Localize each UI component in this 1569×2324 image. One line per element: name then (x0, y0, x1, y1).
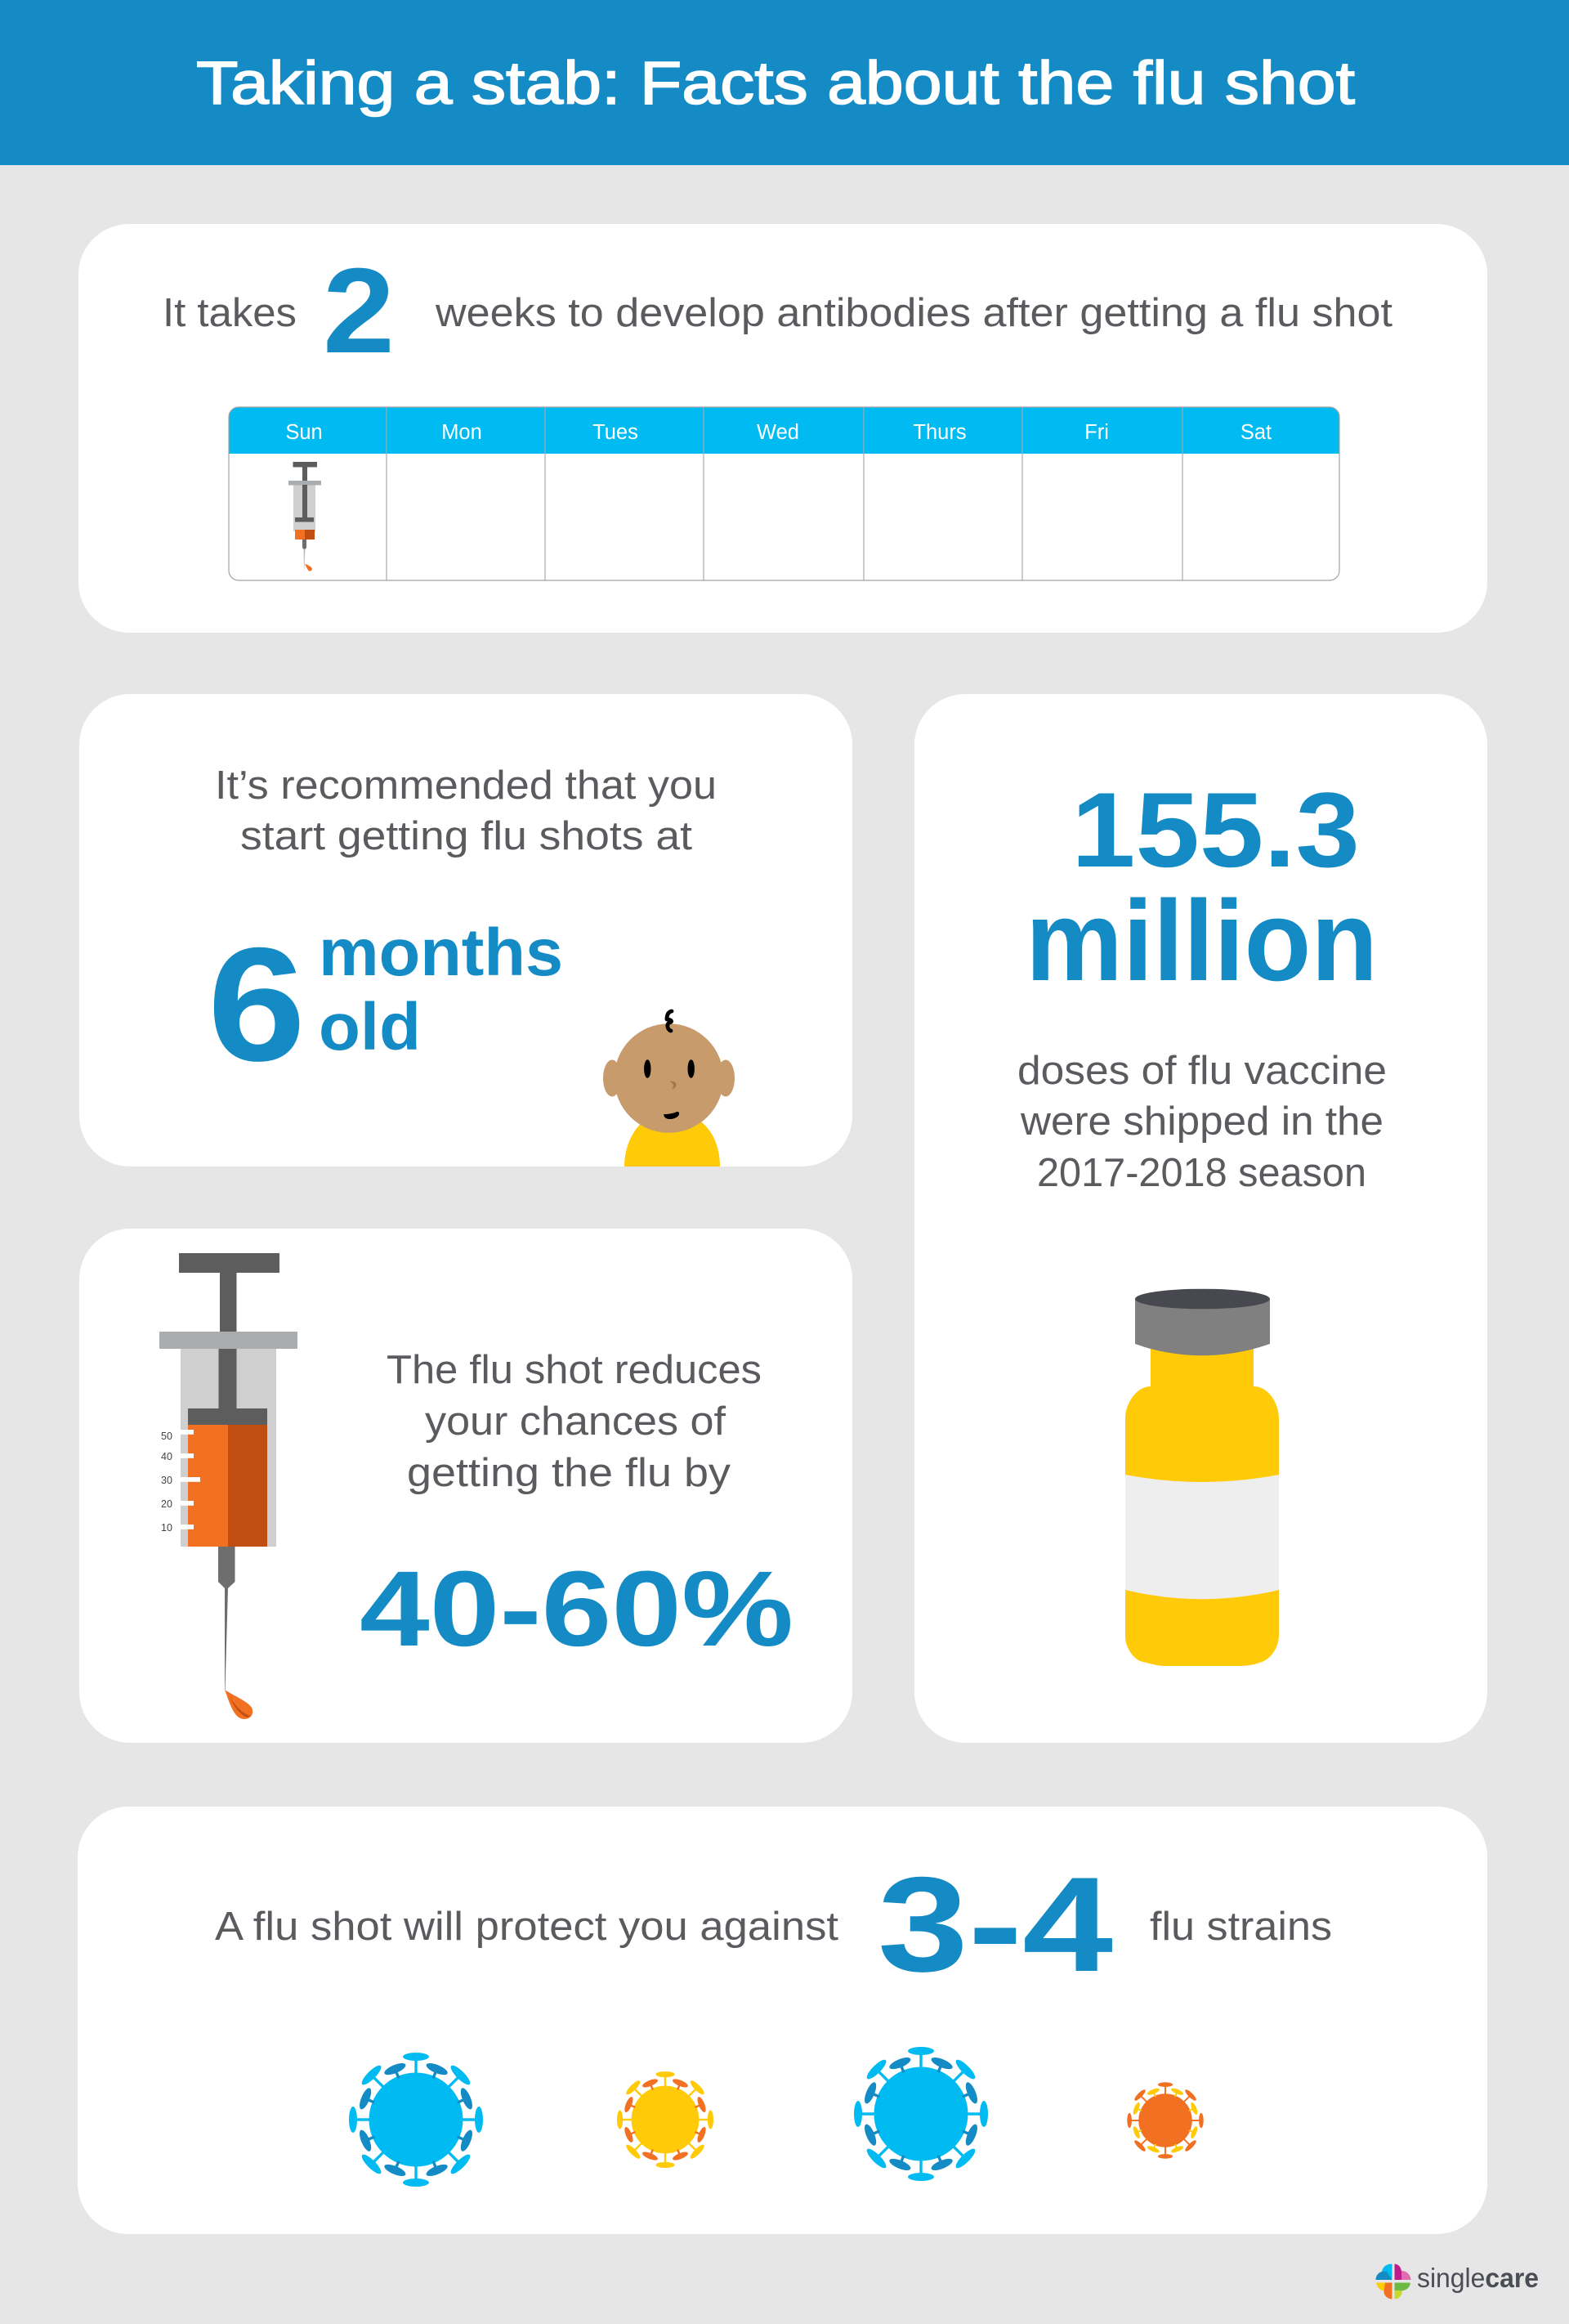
calendar day labels: Fri (1084, 421, 1109, 444)
text: doses shipped: doses of flu vaccine (1017, 1049, 1387, 1093)
text: it takes: It takes (163, 291, 297, 335)
big number 40-60%: 40-60% (360, 1548, 793, 1668)
text: flu shot reduces chances: The flu shot reduces (387, 1348, 762, 1392)
syringe scale labels: 10 (161, 1522, 172, 1534)
calendar day labels: Wed (757, 421, 799, 444)
panel: flu strains (78, 1807, 1487, 2234)
syringe scale labels: 50 (161, 1431, 172, 1442)
text: weeks to develop antibodies: weeks to develop antibodies after getting a flu shot (435, 291, 1392, 335)
syringe scale labels (161, 1431, 172, 1534)
icon: vaccine vial (1125, 1289, 1279, 1666)
panel: six months old (79, 694, 852, 1166)
calendar day labels: Sun (285, 421, 323, 444)
icon: virus orange (1127, 2082, 1204, 2159)
panel: doses shipped (914, 694, 1487, 1743)
header banner (0, 0, 1569, 165)
syringe scale ticks (181, 1430, 200, 1529)
syringe scale labels: 40 (161, 1451, 172, 1462)
calendar day labels: Mon (441, 421, 482, 444)
text: recommendation: It’s recommended that you (215, 763, 717, 808)
text: flu shot reduces chances: your chances of (425, 1399, 726, 1444)
big number 155.3 million: million (1026, 876, 1378, 1005)
text: doses shipped: 2017-2018 season (1037, 1151, 1366, 1195)
calendar day labels (285, 421, 1272, 444)
text: doses shipped (1017, 1049, 1387, 1195)
big number 3-4: 3-4 (878, 1849, 1113, 1999)
title: Taking a stab: Facts about the flu shot (196, 49, 1355, 117)
icon: virus blue second (854, 2047, 988, 2181)
icon: logo flower (1376, 2264, 1410, 2299)
text: flu shot reduces chances (387, 1348, 762, 1495)
text: months old: old (319, 990, 421, 1064)
syringe scale labels: 20 (161, 1498, 172, 1510)
text: recommendation: start getting flu shots at (240, 814, 692, 858)
icon: baby (603, 1011, 735, 1166)
icon: small syringe (288, 462, 321, 573)
calendar day labels: Sat (1240, 421, 1272, 444)
syringe scale labels: 30 (161, 1475, 172, 1486)
text: doses shipped: were shipped in the (1020, 1099, 1383, 1144)
big number 2: 2 (323, 244, 395, 378)
text: months old: months (319, 916, 563, 990)
logo wordmark: singlecare (1417, 2263, 1539, 2293)
icon: drop (225, 1690, 253, 1719)
icon: virus blue large (349, 2053, 483, 2187)
text: months old (319, 916, 563, 1064)
text: a flu shot will protect: A flu shot will protect you against (215, 1905, 838, 1949)
panel: two weeks to develop antibodies (78, 224, 1487, 633)
big number 6: 6 (208, 914, 306, 1095)
big number 155.3 million: 155.3 (1071, 770, 1360, 889)
text: flu shot reduces chances: getting the flu by (407, 1451, 731, 1495)
logo: singlecare (1376, 2263, 1539, 2299)
icon: large syringe (159, 1253, 297, 1719)
icon: virus yellow (617, 2071, 713, 2168)
calendar day labels: Tues (592, 421, 638, 444)
calendar (229, 407, 1339, 580)
text: recommendation (215, 763, 717, 858)
text: flu strains: flu strains (1150, 1905, 1332, 1949)
calendar day labels: Thurs (913, 421, 967, 444)
big number 155.3 million (1026, 770, 1378, 1005)
panel: reduces chances of flu (79, 1229, 852, 1743)
